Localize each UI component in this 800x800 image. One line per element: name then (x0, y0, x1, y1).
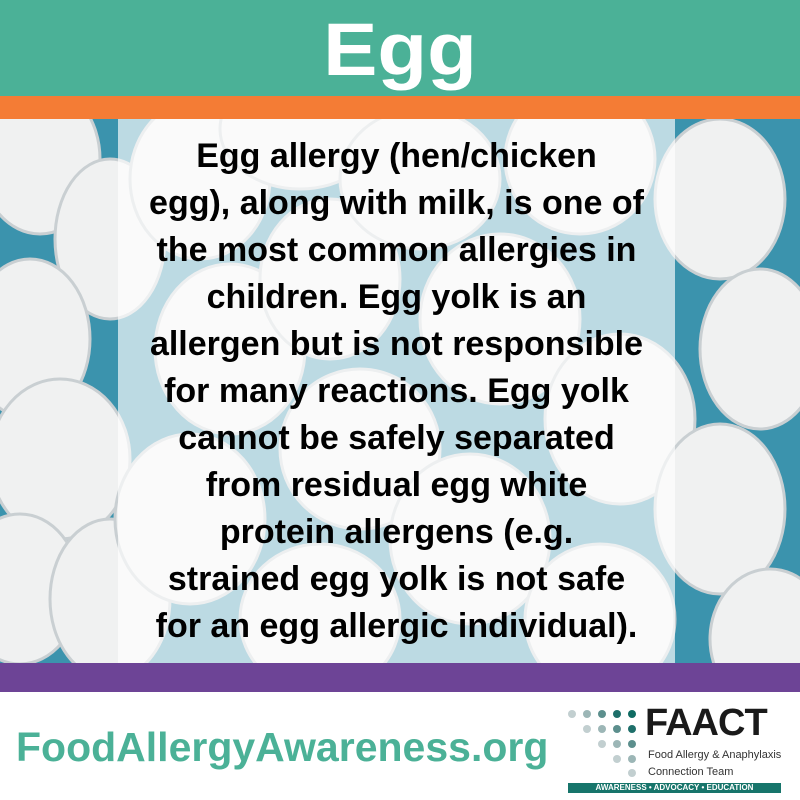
body text: egg), along with milk, is one of (149, 184, 644, 222)
body text: allergen but is not responsible (150, 325, 643, 363)
logo subtitle (648, 749, 781, 778)
photo background: eggs (0, 119, 800, 663)
body text: protein allergens (e.g. (220, 513, 573, 551)
orange stripe (0, 96, 800, 119)
text panel (118, 119, 675, 663)
body text: Egg allergy (hen/chicken (196, 137, 597, 175)
body text: cannot be safely separated (178, 419, 615, 457)
logo wordmark: FAACT (645, 702, 767, 744)
FAACT logo (568, 702, 781, 793)
logo subtitle: Connection Team (648, 766, 733, 778)
title: Egg (323, 8, 477, 91)
purple stripe (0, 663, 800, 692)
body text: the most common allergies in (157, 231, 636, 269)
logo subtitle: Food Allergy & Anaphylaxis (648, 749, 781, 761)
body text: strained egg yolk is not safe (168, 560, 625, 598)
icon: dot grid (568, 710, 636, 777)
body text: children. Egg yolk is an (207, 278, 586, 316)
body text: from residual egg white (206, 466, 587, 504)
header bar (0, 0, 800, 96)
logo tagline bar: AWARENESS • ADVOCACY • EDUCATION (596, 783, 753, 792)
website url: FoodAllergyAwareness.org (16, 724, 548, 770)
body text: for many reactions. Egg yolk (164, 372, 629, 410)
body text: for an egg allergic individual). (156, 607, 637, 645)
logo tagline bar (568, 783, 781, 793)
body text (149, 137, 644, 645)
